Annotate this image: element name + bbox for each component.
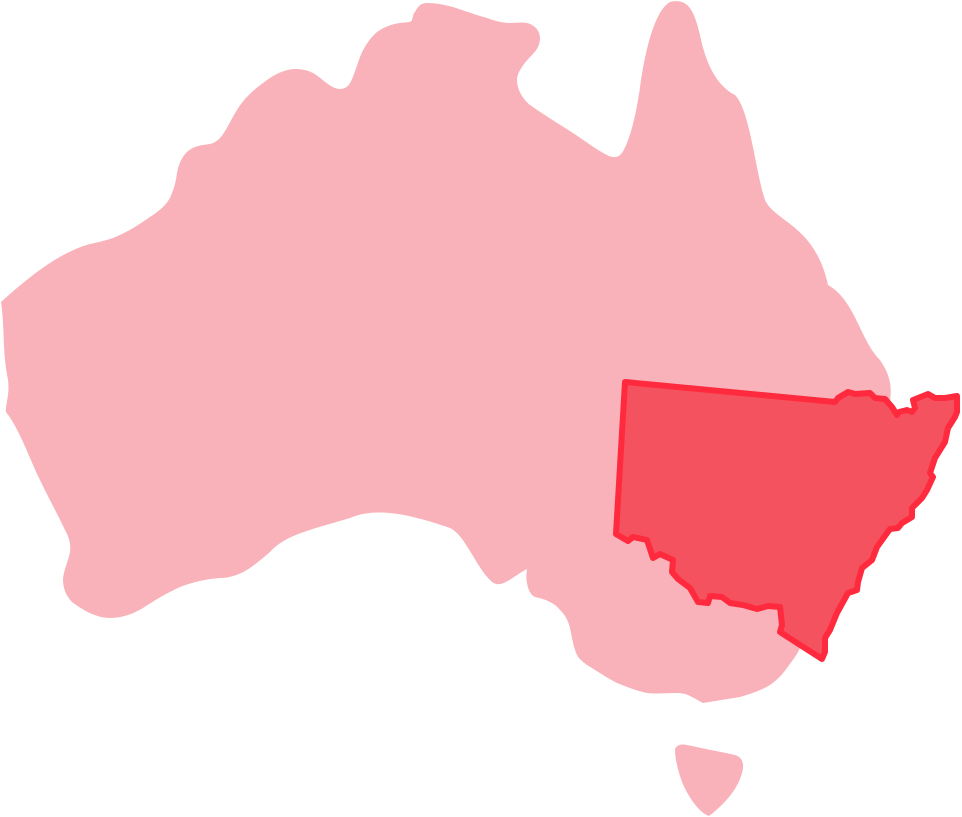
island: Tasmania bbox=[675, 744, 743, 816]
region: New South Wales bbox=[616, 382, 957, 659]
landmass: Australian mainland bbox=[1, 1, 891, 703]
